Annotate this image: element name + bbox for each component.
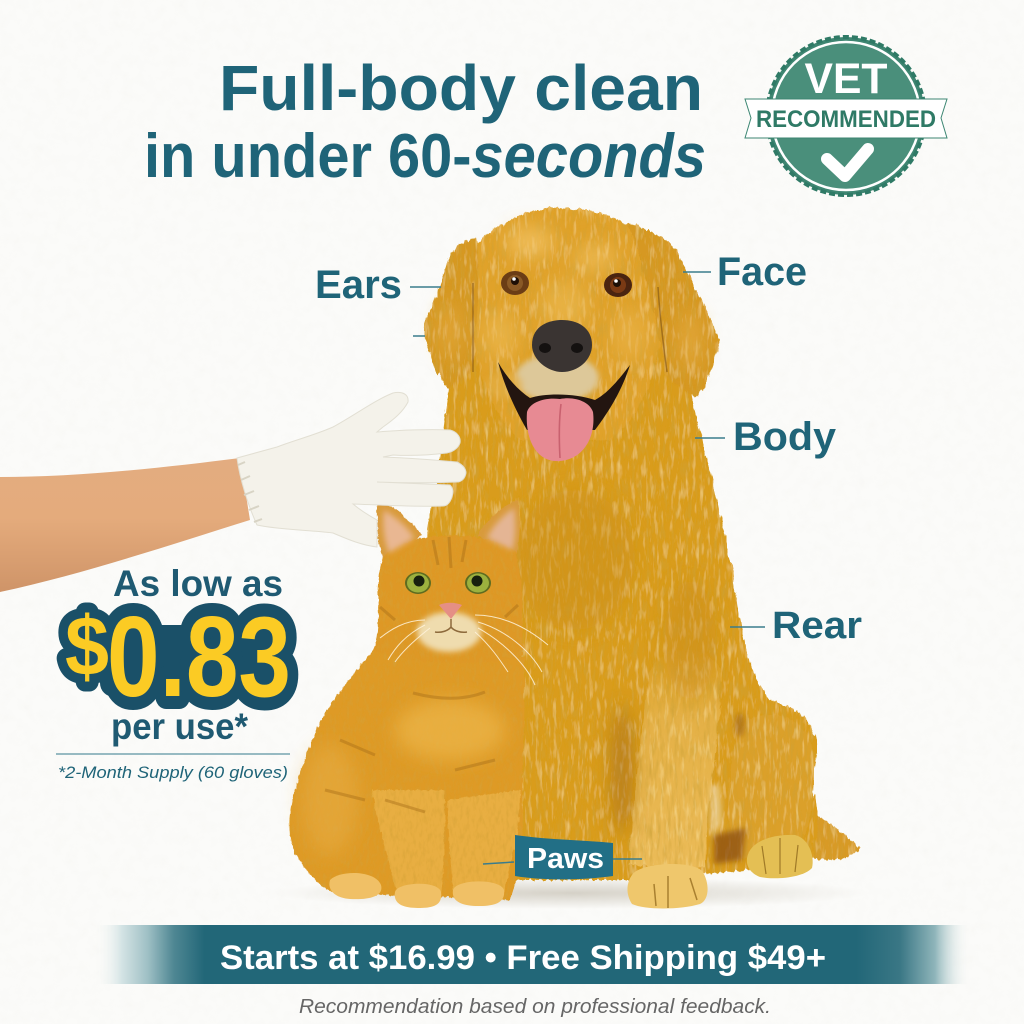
label: rear <box>730 605 862 647</box>
labels <box>315 250 862 879</box>
illustration: cat <box>289 500 548 908</box>
badge: vet recommended <box>745 37 947 195</box>
arm <box>0 458 250 592</box>
cat paws <box>329 873 504 908</box>
bottom banner: Starts at $16.99 • Free Shipping $49+ <box>220 939 826 977</box>
badge: vet recommended: RECOMMENDED <box>756 106 936 133</box>
label: ears <box>315 263 441 336</box>
dog front paw <box>627 864 708 908</box>
price: 0.83 <box>107 594 291 721</box>
cat fur shapes <box>289 500 525 900</box>
cat muzzle <box>417 612 481 652</box>
price: $ <box>65 599 109 693</box>
dog fur shapes <box>423 208 860 880</box>
dog fur shading <box>439 226 716 835</box>
dog eyes <box>501 271 632 297</box>
dog tongue <box>527 398 593 461</box>
cat stripes and collar shadow <box>325 537 518 812</box>
label: body: Body <box>733 415 837 459</box>
cat whiskers <box>380 615 548 685</box>
supply note: *2-Month Supply (60 gloves) <box>58 763 288 782</box>
dog ear creases <box>473 283 667 372</box>
price <box>65 594 291 721</box>
cat nose and mouth <box>439 603 462 619</box>
label: paws: Paws <box>527 843 604 875</box>
title: Full-body clean <box>219 52 703 124</box>
cat eyes <box>405 572 491 594</box>
illustration: arm and glove <box>0 392 466 592</box>
label: face: Face <box>717 250 807 294</box>
floor shadow <box>270 877 870 909</box>
glove cuff <box>238 462 262 522</box>
disclaimer: Recommendation based on professional feedback. <box>299 996 771 1018</box>
label: ears: Ears <box>315 263 402 307</box>
title: in under 60-seconds <box>144 122 706 191</box>
dog muzzle <box>487 354 599 402</box>
price callout <box>56 563 291 782</box>
dog nose <box>532 320 592 372</box>
title <box>144 52 706 191</box>
as low as: As low as <box>113 563 283 604</box>
dog belly shadow and white patch <box>710 713 746 864</box>
glove <box>237 392 466 547</box>
badge: vet recommended: VET <box>804 55 888 103</box>
price: $ <box>65 599 109 693</box>
illustration: dog <box>423 208 860 908</box>
per use: per use* <box>111 706 249 747</box>
label: paws <box>483 835 642 879</box>
dog hind paw <box>747 835 813 878</box>
cat inner ears <box>383 508 515 553</box>
price: 0.83 <box>107 594 291 721</box>
bottom banner <box>95 925 970 984</box>
cat chest highlight <box>302 700 505 855</box>
dog mouth <box>498 362 630 430</box>
label: rear: Rear <box>772 605 862 647</box>
